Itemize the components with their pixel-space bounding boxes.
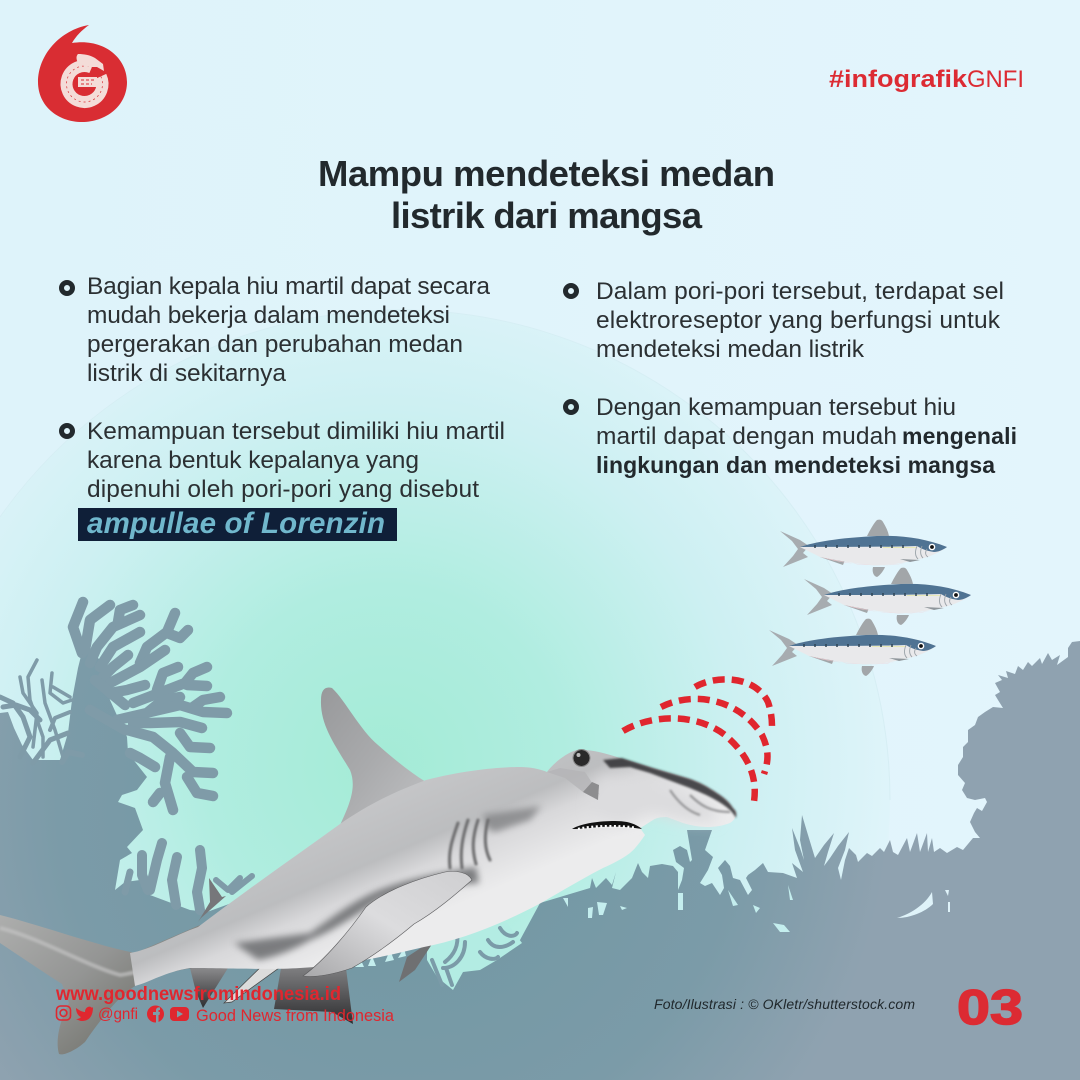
- fish 1: [780, 520, 947, 577]
- hashtag: GNFI: [967, 66, 1024, 93]
- paragraph 2: karena bentuk kepalanya yang: [87, 447, 419, 474]
- seabed and coral silhouette: [0, 602, 1080, 1080]
- right column text: [566, 278, 1017, 478]
- dark lateral band: [234, 867, 479, 960]
- head creases: [670, 790, 730, 815]
- website: www.goodnewsfromindonesia.id: [55, 984, 341, 1005]
- soft coral fronds left: [0, 660, 82, 763]
- paragraph 3: elektroreseptor yang berfungsi untuk: [596, 307, 1001, 334]
- paragraph 2: [87, 418, 505, 503]
- lower left corals: [125, 843, 252, 910]
- paragraph 3: Dalam pori-pori tersebut, terdapat sel: [596, 278, 1004, 305]
- paragraph 1: mudah bekerja dalam mendeteksi: [87, 302, 450, 329]
- photo credit: Foto/Ilustrasi : © OKletr/shutterstock.com: [654, 996, 915, 1012]
- background glow circle: [0, 310, 890, 1080]
- icon: youtube: [170, 1007, 189, 1021]
- bullet: [566, 402, 576, 412]
- paragraph 3: [596, 278, 1004, 363]
- paragraph 4: lingkungan dan mendeteksi mangsa: [596, 452, 995, 478]
- paragraph 4: [596, 394, 1017, 478]
- icon: facebook: [147, 1006, 164, 1023]
- fish 3: [769, 619, 936, 676]
- lit spikes and holes in seabed: [355, 885, 793, 967]
- paragraph 1: listrik di sekitarnya: [87, 360, 286, 387]
- mouth: [572, 821, 642, 829]
- rear fins: [190, 878, 436, 1024]
- title: [318, 153, 775, 236]
- gills: [449, 820, 490, 868]
- logo: [38, 25, 127, 122]
- seabed ground: [0, 641, 1080, 1080]
- dashed signal arcs: [623, 679, 772, 807]
- paragraph 4: martil dapat dengan mudah: [596, 423, 897, 450]
- paragraph 1: Bagian kepala hiu martil dapat secara: [87, 273, 490, 300]
- paragraph 1: [87, 273, 490, 387]
- dorsal fin: [321, 688, 426, 825]
- light head sheen: [590, 775, 715, 825]
- footer contact: [55, 984, 395, 1025]
- paragraph 2: dipenuhi oleh pori-pori yang disebut: [87, 476, 479, 503]
- bullet: [62, 282, 72, 294]
- icon: instagram: [56, 1006, 70, 1020]
- fish 2: [804, 568, 971, 625]
- paragraph 4: Dengan kemampuan tersebut hiu: [596, 394, 956, 421]
- handle: @gnfi: [98, 1006, 138, 1023]
- page number: 03: [957, 981, 1023, 1035]
- hammer top edge: [603, 758, 736, 818]
- hammerhead shark: [0, 688, 736, 1054]
- eye: [573, 750, 590, 766]
- bullet: [566, 286, 576, 296]
- hammer underside flap: [547, 768, 600, 800]
- icon: twitter: [76, 1007, 93, 1021]
- fan coral branches: [73, 602, 227, 810]
- sardine school: [769, 520, 971, 676]
- tail: [0, 915, 200, 1054]
- hashtag: [829, 66, 1024, 93]
- title: listrik dari mangsa: [391, 195, 703, 236]
- reef swirls in lit patch: [432, 928, 517, 985]
- hashtag: #infografik: [829, 66, 968, 93]
- paragraph 4: mengenali: [902, 423, 1017, 449]
- pectoral fin: [303, 871, 472, 977]
- paragraph 1: pergerakan dan perubahan medan: [87, 331, 463, 358]
- bullet: [62, 426, 72, 436]
- highlight term: ampullae of Lorenzin: [87, 507, 385, 540]
- body and head: [130, 750, 736, 986]
- paragraph 2: Kemampuan tersebut dimiliki hiu martil: [87, 418, 505, 445]
- page name: Good News from Indonesia: [196, 1006, 395, 1025]
- lit patch under the shark: [427, 923, 522, 990]
- paragraph 3: mendeteksi medan listrik: [596, 336, 865, 363]
- left column text: [62, 273, 505, 541]
- title: Mampu mendeteksi medan: [318, 153, 775, 194]
- upper dark patch behind gills: [483, 806, 541, 832]
